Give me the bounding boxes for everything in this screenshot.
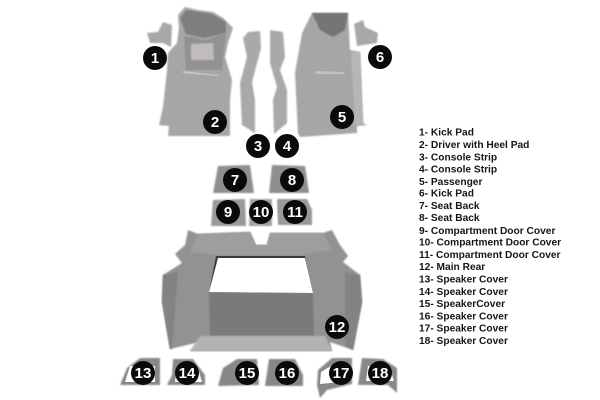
parts legend: 6- Kick Pad (419, 188, 474, 200)
parts legend: 5- Passenger (419, 177, 482, 188)
part 18: speaker cover (358, 358, 397, 393)
part 17: speaker cover: 17 (333, 365, 349, 382)
part 10: compartment door cover (249, 199, 273, 226)
part 13: speaker cover: 13 (135, 365, 151, 382)
parts legend: 8- Seat Back (419, 213, 480, 224)
part 8: seat back (269, 165, 309, 193)
parts legend: 9- Compartment Door Cover (419, 226, 555, 237)
parts legend (419, 128, 561, 347)
parts legend: 11- Compartment Door Cover (419, 250, 561, 261)
part 10: compartment door cover: 10 (253, 204, 269, 221)
part 9: compartment door cover: 9 (224, 204, 232, 221)
part 12: main rear (162, 230, 362, 351)
part 14: speaker cover: 14 (179, 365, 196, 382)
part 15: speaker cover: 15 (239, 365, 255, 382)
parts legend: 4- Console Strip (419, 164, 497, 176)
parts legend: 3- Console Strip (419, 152, 497, 164)
part 1: kick pad: 1 (151, 50, 159, 67)
parts legend: 7- Seat Back (419, 201, 480, 212)
part 14: speaker cover (167, 359, 205, 385)
part 1: kick pad (143, 22, 172, 70)
part 13: speaker cover (120, 358, 160, 385)
part 8: seat back: 8 (288, 172, 296, 189)
part 7: seat back: 7 (231, 172, 239, 189)
parts legend: 10- Compartment Door Cover (419, 238, 561, 248)
part 2: driver with heel pad (159, 7, 233, 136)
parts legend: 18- Speaker Cover (419, 336, 508, 347)
part 5: passenger (295, 13, 367, 137)
parts legend: 1- Kick Pad (419, 128, 474, 138)
parts legend: 15- SpeakerCover (419, 299, 505, 310)
part 17: speaker cover (317, 358, 353, 398)
part 3: console strip: 3 (254, 138, 262, 155)
parts legend: 16- Speaker Cover (419, 312, 508, 322)
part 7: seat back (213, 165, 254, 193)
part 11: compartment door cover: 11 (287, 204, 303, 221)
part 16: speaker cover (265, 359, 303, 386)
part 4: console strip: 4 (283, 138, 292, 155)
part 11: compartment door cover (277, 199, 312, 225)
parts legend: 17- Speaker Cover (419, 324, 508, 334)
part 3: console strip (240, 31, 270, 158)
part 6: kick pad: 6 (376, 49, 384, 66)
parts legend: 13- Speaker Cover (419, 274, 508, 286)
part 5: passenger: 5 (338, 109, 346, 126)
part 18: speaker cover: 18 (372, 365, 388, 382)
part 12: main rear: 12 (329, 319, 345, 336)
parts legend: 14- Speaker Cover (419, 287, 508, 298)
parts legend: 2- Driver with Heel Pad (419, 140, 529, 151)
part 2: driver with heel pad: 2 (211, 114, 219, 131)
part 16: speaker cover: 16 (279, 365, 295, 382)
part 9: compartment door cover (211, 199, 246, 226)
part 15: speaker cover (218, 359, 259, 386)
parts legend: 12- Main Rear (419, 262, 485, 273)
part 4: console strip (270, 30, 299, 158)
part 6: kick pad (354, 20, 392, 69)
